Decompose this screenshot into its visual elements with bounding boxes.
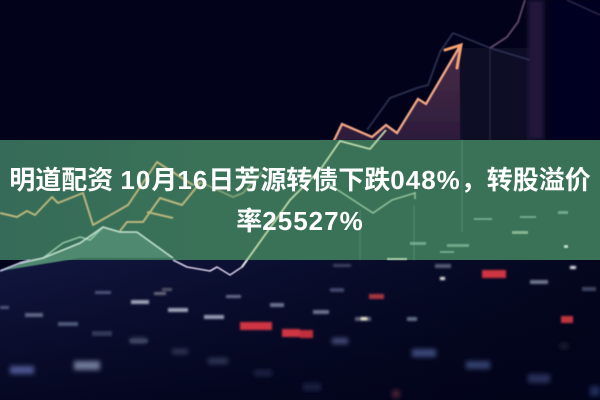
sharp grey marks [0, 264, 596, 343]
faint background lines [367, 0, 600, 140]
orange rising line with arrow [320, 45, 461, 170]
translucent green title band [0, 140, 600, 260]
white line on the dark floor [0, 260, 247, 275]
data marks on floor [0, 264, 600, 398]
title: 率25527% [236, 206, 364, 236]
faint marks inside band [387, 211, 568, 260]
dark navy floor [0, 258, 600, 400]
red highlighted cells [240, 270, 573, 338]
chart lines seen through band [0, 130, 462, 271]
title: 明道配资 10月16日芳源转债下跌048%，转股溢价 [9, 165, 591, 195]
purple area under rising line [320, 0, 600, 170]
blurred blue marks [10, 338, 600, 398]
title [9, 165, 591, 236]
